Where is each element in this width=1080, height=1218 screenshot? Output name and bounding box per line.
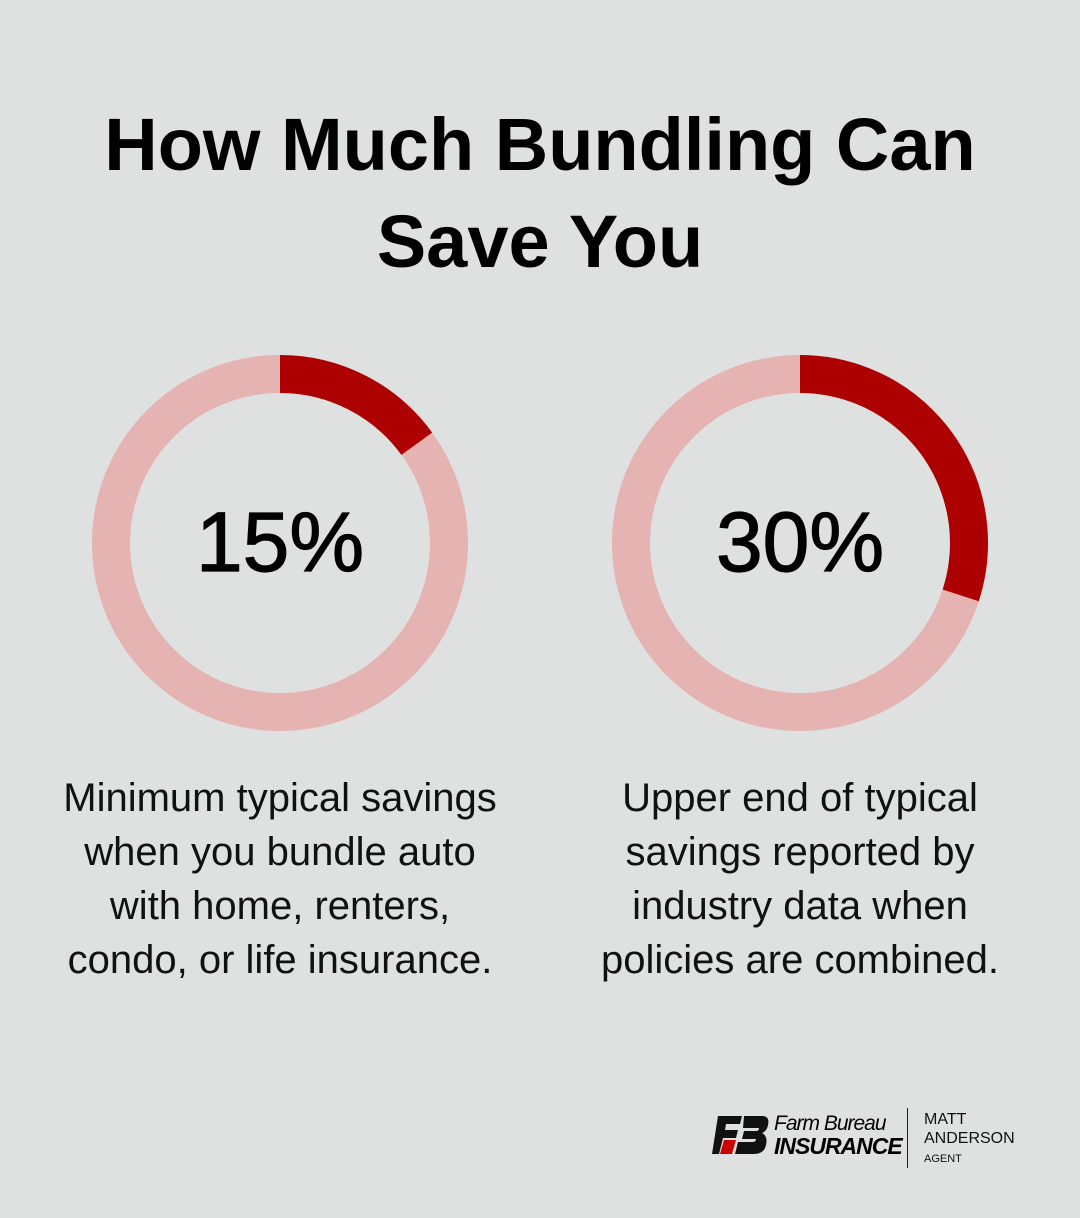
text block: left description: condo, or life insurance. — [68, 938, 492, 982]
title: How Much Bundling Can — [104, 103, 976, 186]
text: Farm Bureau Insurance: Farm Bureau — [774, 1112, 886, 1135]
chart: 15% donut — [92, 355, 468, 731]
text block: right description: Upper end of typical — [622, 776, 978, 820]
text block: right description — [601, 776, 999, 982]
text: agent name: ANDERSON — [924, 1130, 1015, 1147]
text: agent name: AGENT — [924, 1153, 962, 1165]
text block: right description: industry data when — [632, 884, 968, 928]
text block: left description — [63, 776, 497, 982]
text: Farm Bureau Insurance: INSURANCE — [774, 1133, 902, 1159]
text block: right description: policies are combined. — [601, 938, 999, 982]
icon: FB mark — [712, 1116, 768, 1154]
title: Save You — [377, 200, 703, 283]
text block: right description: savings reported by — [625, 830, 975, 874]
text block: left description: when you bundle auto — [84, 830, 476, 874]
logo — [712, 1108, 1015, 1168]
title — [104, 103, 976, 283]
chart: 15% donut: 15% — [196, 495, 364, 589]
chart: 30% donut: 30% — [716, 495, 884, 589]
text block: left description: Minimum typical savings — [63, 776, 497, 820]
text: Farm Bureau Insurance — [774, 1112, 904, 1159]
text block: left description: with home, renters, — [110, 884, 450, 928]
text: agent name — [924, 1111, 1015, 1165]
chart: 30% donut — [612, 355, 988, 731]
text: agent name: MATT — [924, 1111, 966, 1128]
